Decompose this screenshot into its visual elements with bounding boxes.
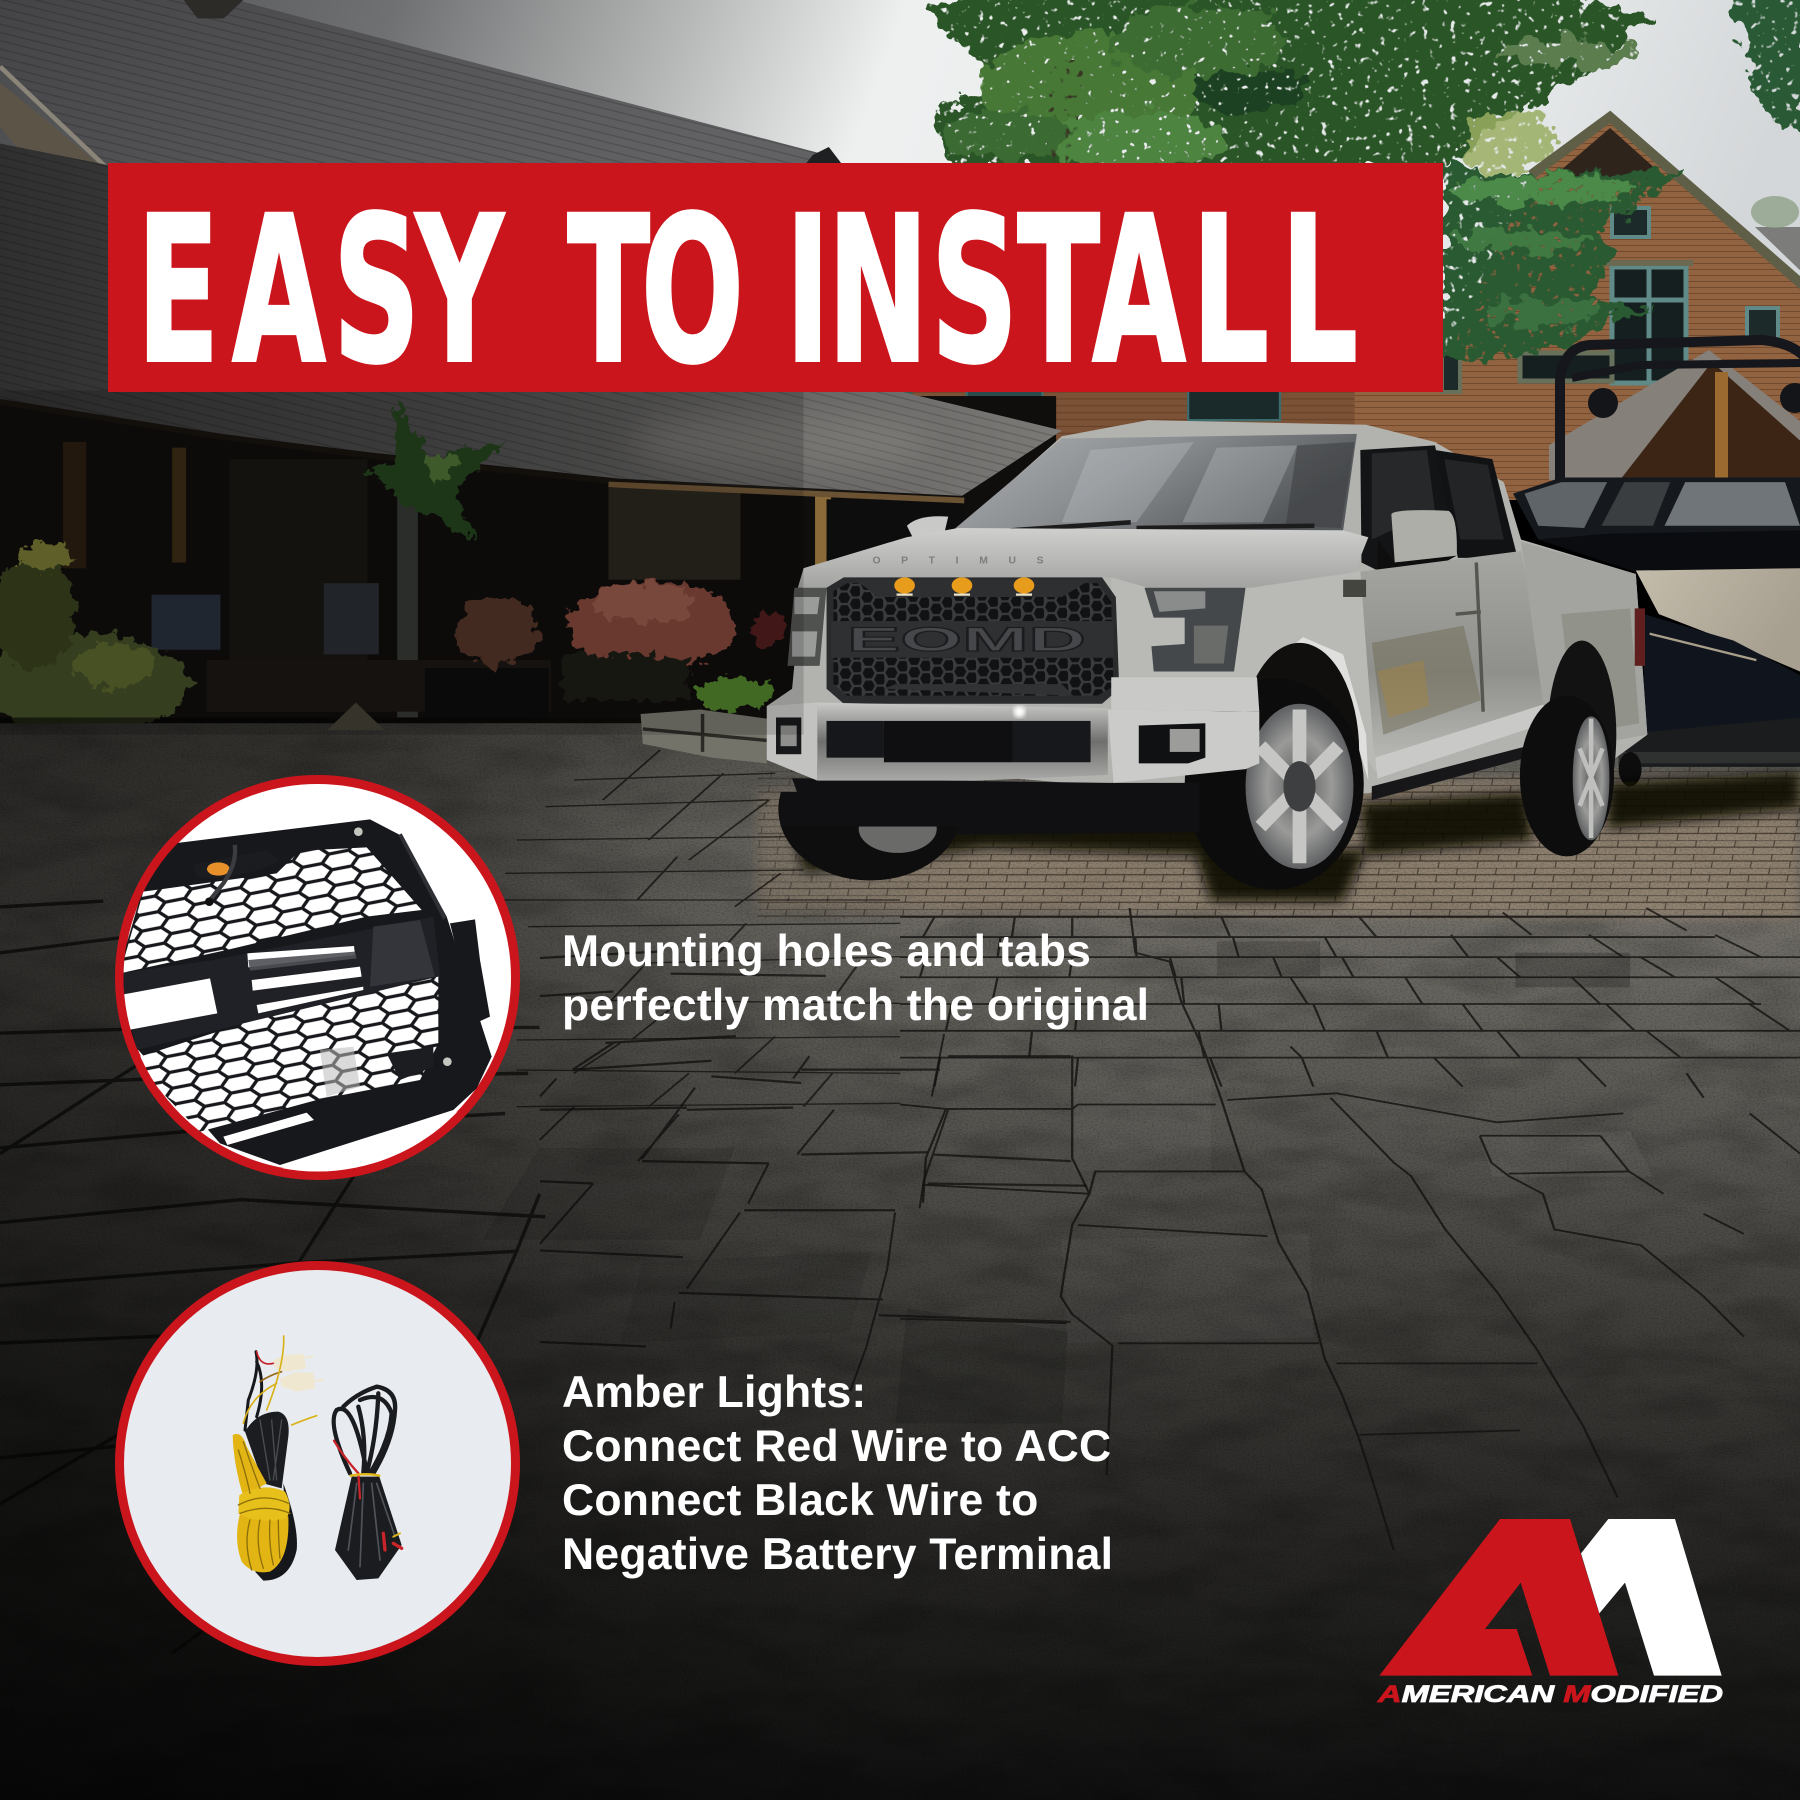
text: amber lights wiring: Connect Black Wire to	[562, 1476, 1038, 1525]
mottled stains	[0, 723, 1800, 1800]
hood	[798, 528, 1368, 588]
green shrub and rocks	[327, 676, 771, 763]
left darkening	[0, 717, 1800, 1800]
upper roof left	[0, 0, 844, 207]
right stone joints	[900, 908, 1800, 1550]
grille frame	[120, 819, 492, 1165]
front fender	[1111, 572, 1375, 771]
middle logo bar	[120, 917, 440, 1050]
upper mesh	[120, 847, 422, 973]
hood lettering: OPTIMUS	[872, 556, 1064, 567]
connectors	[273, 1354, 323, 1392]
front lobe of pine over house	[1440, 163, 1680, 362]
grille emblem: EOMD	[847, 621, 1086, 659]
left garden bushes	[0, 542, 189, 763]
windshield	[953, 434, 1357, 530]
front bumper	[767, 677, 1259, 783]
long siding wall under banner	[821, 390, 1355, 453]
side windows	[1360, 445, 1456, 571]
title text: EASY TO INSTALL	[137, 174, 1358, 409]
yellow coil	[233, 1434, 290, 1572]
title banner	[108, 163, 1443, 409]
doors with reflection	[1360, 551, 1552, 771]
logo: American Modified	[1377, 1519, 1723, 1708]
palm plant	[367, 396, 505, 540]
warm sunlit brick area	[758, 775, 1800, 918]
left harness black bundle	[245, 1352, 297, 1581]
lighter and darker stones	[482, 941, 1653, 1423]
right harness red leads and tie	[334, 1441, 402, 1550]
text: mounting holes: Mounting holes and tabs	[562, 927, 1091, 976]
left front wheel	[778, 792, 956, 880]
far-left stone joints	[0, 901, 545, 1653]
circle: grille product photo	[120, 780, 516, 1193]
logo white 1	[1581, 1519, 1722, 1676]
text: amber lights wiring: Connect Red Wire to ACC	[562, 1422, 1111, 1471]
bottom slot	[223, 1113, 314, 1145]
mounting tabs	[450, 919, 490, 1023]
lower long roof	[0, 143, 1062, 501]
grain texture	[0, 723, 1800, 1800]
rear wheel	[1520, 696, 1614, 856]
pickup truck with amber-light grille	[767, 420, 1800, 901]
amber lights	[894, 577, 1034, 595]
overall top-left darkening over the house	[0, 390, 804, 735]
body silhouette	[767, 420, 1647, 804]
logo red A	[1379, 1519, 1618, 1676]
wheel arches	[1240, 643, 1359, 861]
right front wheel	[1185, 678, 1364, 890]
truck bed	[1521, 542, 1647, 752]
centre stone joints	[540, 951, 1087, 1391]
dark porch under left roof	[0, 396, 1056, 740]
grille	[827, 577, 1119, 704]
left headlight	[788, 588, 827, 666]
sky	[0, 0, 1800, 482]
right house with gable and windows	[1340, 115, 1800, 500]
loose red and yellow leads	[243, 1336, 317, 1425]
text: amber lights wiring: Amber Lights:	[562, 1368, 866, 1417]
lower mesh	[140, 977, 438, 1132]
side mirrors	[1391, 510, 1457, 563]
left stone joints near truck	[488, 750, 900, 1140]
headlight	[1145, 588, 1246, 672]
pine tree behind banner	[925, 0, 1800, 172]
red maple shrubs	[455, 580, 785, 700]
white area beneath frame	[282, 1112, 458, 1172]
text: amber lights wiring: Negative Battery Terminal	[562, 1530, 1113, 1579]
driveway pavement	[0, 717, 1800, 1800]
amber marker light and wire	[205, 844, 238, 906]
lower valance	[792, 778, 1200, 835]
truck shadow	[792, 771, 1800, 901]
screws	[354, 827, 363, 836]
circle: wiring harness photo	[120, 1266, 516, 1662]
text: mounting holes: perfectly match the original	[562, 981, 1149, 1030]
boathouse and wakeboard tower	[1549, 340, 1800, 480]
pine tree, house and boathouse backdrop	[925, 0, 1800, 500]
wipers	[1010, 522, 1314, 530]
right harness bundle	[334, 1387, 402, 1580]
boat on trailer with boathouse gable	[1513, 340, 1800, 786]
logo slots	[120, 946, 363, 1030]
logo wordmark: A MERICAN M ODIFIED	[1377, 1681, 1723, 1708]
